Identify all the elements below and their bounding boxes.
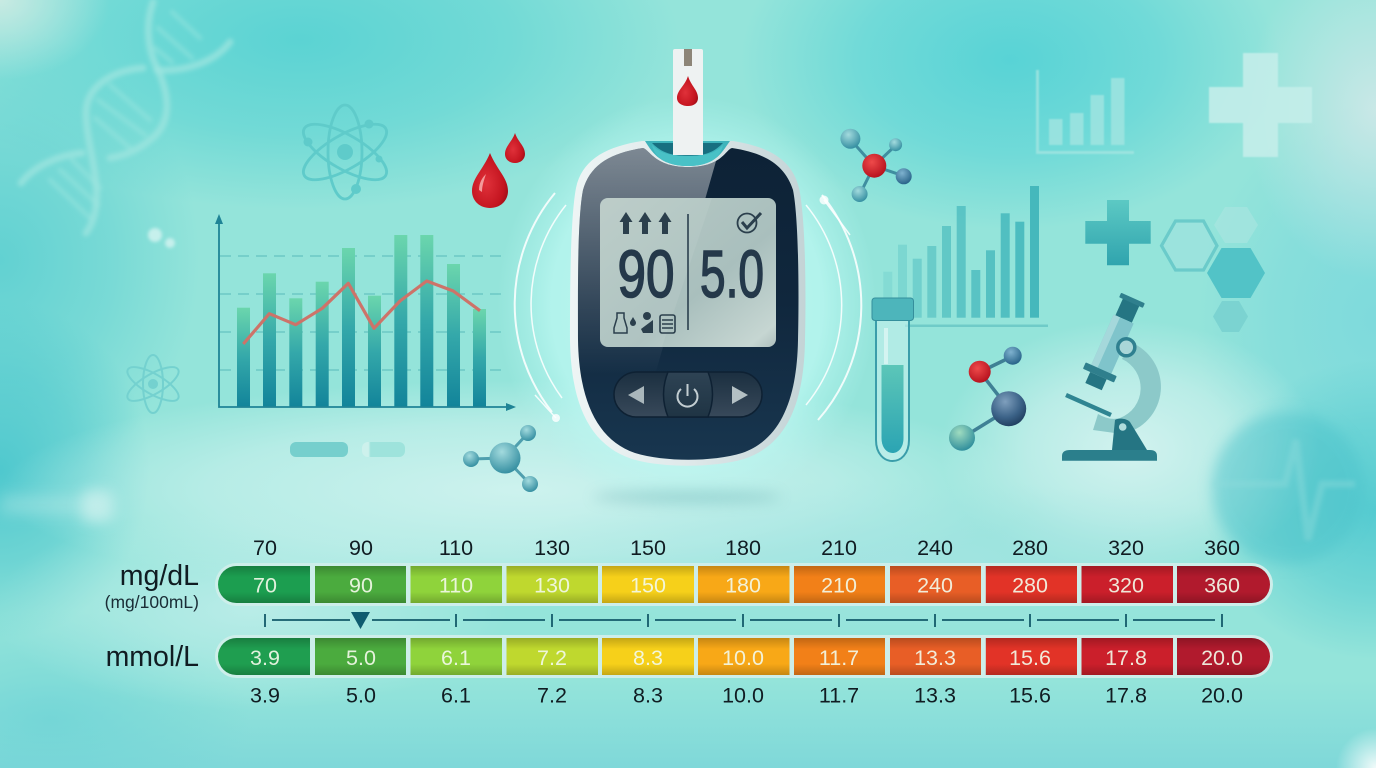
bottom value labels: 15.6	[1009, 684, 1051, 708]
bottom value labels: 3.9	[250, 684, 280, 708]
strip slot	[645, 141, 730, 166]
bottom value labels	[250, 684, 1243, 708]
bottom value labels: 20.0	[1201, 684, 1243, 708]
top value labels: 320	[1108, 536, 1144, 560]
mmol/L colour bar: 8.3	[633, 646, 663, 670]
icon: blood drops	[472, 133, 525, 208]
mg/dL colour bar: 240	[917, 574, 953, 598]
bottom value labels: 10.0	[722, 684, 764, 708]
bottom value labels: 5.0	[346, 684, 376, 708]
background icon: heartbeat circle	[1212, 412, 1364, 564]
legend pills	[290, 442, 405, 457]
unit label: mmol/L: mmol/L	[106, 641, 199, 673]
meter glow	[497, 95, 877, 515]
left arrow	[628, 386, 644, 404]
microscope stand	[1112, 419, 1147, 450]
bottom value labels: 13.3	[914, 684, 956, 708]
meter screen	[600, 198, 776, 347]
icon: hexagons	[1162, 207, 1265, 332]
bottom value labels: 17.8	[1105, 684, 1147, 708]
unit label: mg/dL: mg/dL	[120, 560, 199, 592]
background icon: large plus	[1209, 53, 1312, 157]
meter body	[578, 148, 798, 460]
unit label: mg/dL	[105, 560, 199, 612]
mg/dL colour bar: 150	[630, 574, 666, 598]
bottom value labels: 6.1	[441, 684, 471, 708]
mg/dL colour bar: 360	[1204, 574, 1240, 598]
right bar chart	[883, 186, 1048, 327]
background icon: DNA helix	[21, 2, 230, 233]
glucose meter	[497, 49, 877, 515]
gaps overlay	[310, 566, 1177, 603]
mg/dL colour bar: 320	[1108, 574, 1144, 598]
molecule lower right	[949, 347, 1026, 451]
mg/dL colour bar	[215, 563, 1273, 606]
molecule upper right	[840, 129, 912, 202]
top value labels: 210	[821, 536, 857, 560]
microscope arm	[1093, 342, 1161, 434]
chart axes	[215, 214, 516, 411]
mmol/L colour bar: 5.0	[346, 646, 376, 670]
microscope base	[1062, 450, 1157, 461]
marker triangle	[351, 612, 370, 629]
background icon: atom	[296, 105, 394, 199]
top value labels: 150	[630, 536, 666, 560]
chart gridlines	[220, 256, 508, 370]
background blur: pale dumbbell	[148, 228, 175, 248]
reading mmol/L: 5.0	[700, 237, 764, 312]
chart trend line	[243, 281, 480, 344]
bar and line chart	[215, 214, 516, 411]
molecule lower left	[463, 425, 538, 492]
top value labels	[253, 536, 1240, 560]
background icon: small atom	[123, 355, 183, 413]
microscope knob	[1118, 339, 1135, 356]
right arrow	[732, 386, 748, 404]
power icon	[678, 384, 698, 407]
top value labels: 280	[1012, 536, 1048, 560]
microscope tube	[1078, 291, 1149, 394]
tick ruler with marker	[265, 612, 1222, 629]
top value labels: 110	[439, 536, 473, 560]
mmol/L colour bar: 17.8	[1105, 646, 1147, 670]
mmol/L colour bar: 11.7	[819, 646, 859, 670]
check icon	[738, 213, 761, 232]
top value labels: 70	[253, 536, 277, 560]
mmol/L colour bar: 7.2	[537, 646, 567, 670]
mg/dL colour bar: 130	[534, 574, 570, 598]
mmol/L colour bar: 20.0	[1201, 646, 1243, 670]
top value labels: 180	[725, 536, 761, 560]
meter halo arcs	[515, 193, 861, 422]
mmol/L colour bar: 13.3	[914, 646, 956, 670]
mg/dL colour bar: 70	[253, 574, 277, 598]
meter glare	[578, 148, 716, 358]
top value labels: 90	[349, 536, 373, 560]
mg/dL colour bar: 90	[349, 574, 373, 598]
bottom value labels: 7.2	[537, 684, 567, 708]
top value labels: 240	[917, 536, 953, 560]
mmol/L colour bar: 3.9	[250, 646, 280, 670]
icon: test tube	[872, 298, 914, 461]
trend arrows	[620, 212, 672, 234]
top value labels: 360	[1204, 536, 1240, 560]
mmol/L colour bar: 15.6	[1009, 646, 1051, 670]
icon: plus	[1085, 200, 1151, 265]
mmol/L colour bar: 10.0	[722, 646, 764, 670]
meter shadow	[592, 491, 782, 503]
gaps overlay	[310, 638, 1177, 675]
mg/dL colour bar: 110	[439, 574, 473, 598]
mg/dL colour bar: 180	[725, 574, 761, 598]
chart bars	[237, 235, 486, 407]
mmol/L colour bar: 6.1	[441, 646, 471, 670]
top value labels: 130	[534, 536, 570, 560]
mg/dL colour bar: 210	[821, 574, 857, 598]
reading mg/dL: 90	[618, 237, 674, 312]
test strip	[673, 49, 703, 155]
microscope stage	[1066, 395, 1111, 415]
meter casing	[570, 141, 805, 466]
unit label: mg/dL: (mg/100mL)	[105, 592, 199, 612]
slot lip	[652, 145, 723, 166]
screen status icons	[614, 312, 675, 333]
glucose scale	[105, 536, 1273, 708]
bottom value labels: 8.3	[633, 684, 663, 708]
background icon: small bar chart	[1036, 70, 1134, 154]
background blur: light streak	[0, 490, 114, 522]
mmol/L colour bar	[215, 635, 1273, 678]
icon: microscope	[1062, 291, 1161, 461]
meter buttons	[614, 372, 762, 417]
mg/dL colour bar: 280	[1012, 574, 1048, 598]
bottom value labels: 11.7	[819, 684, 859, 708]
